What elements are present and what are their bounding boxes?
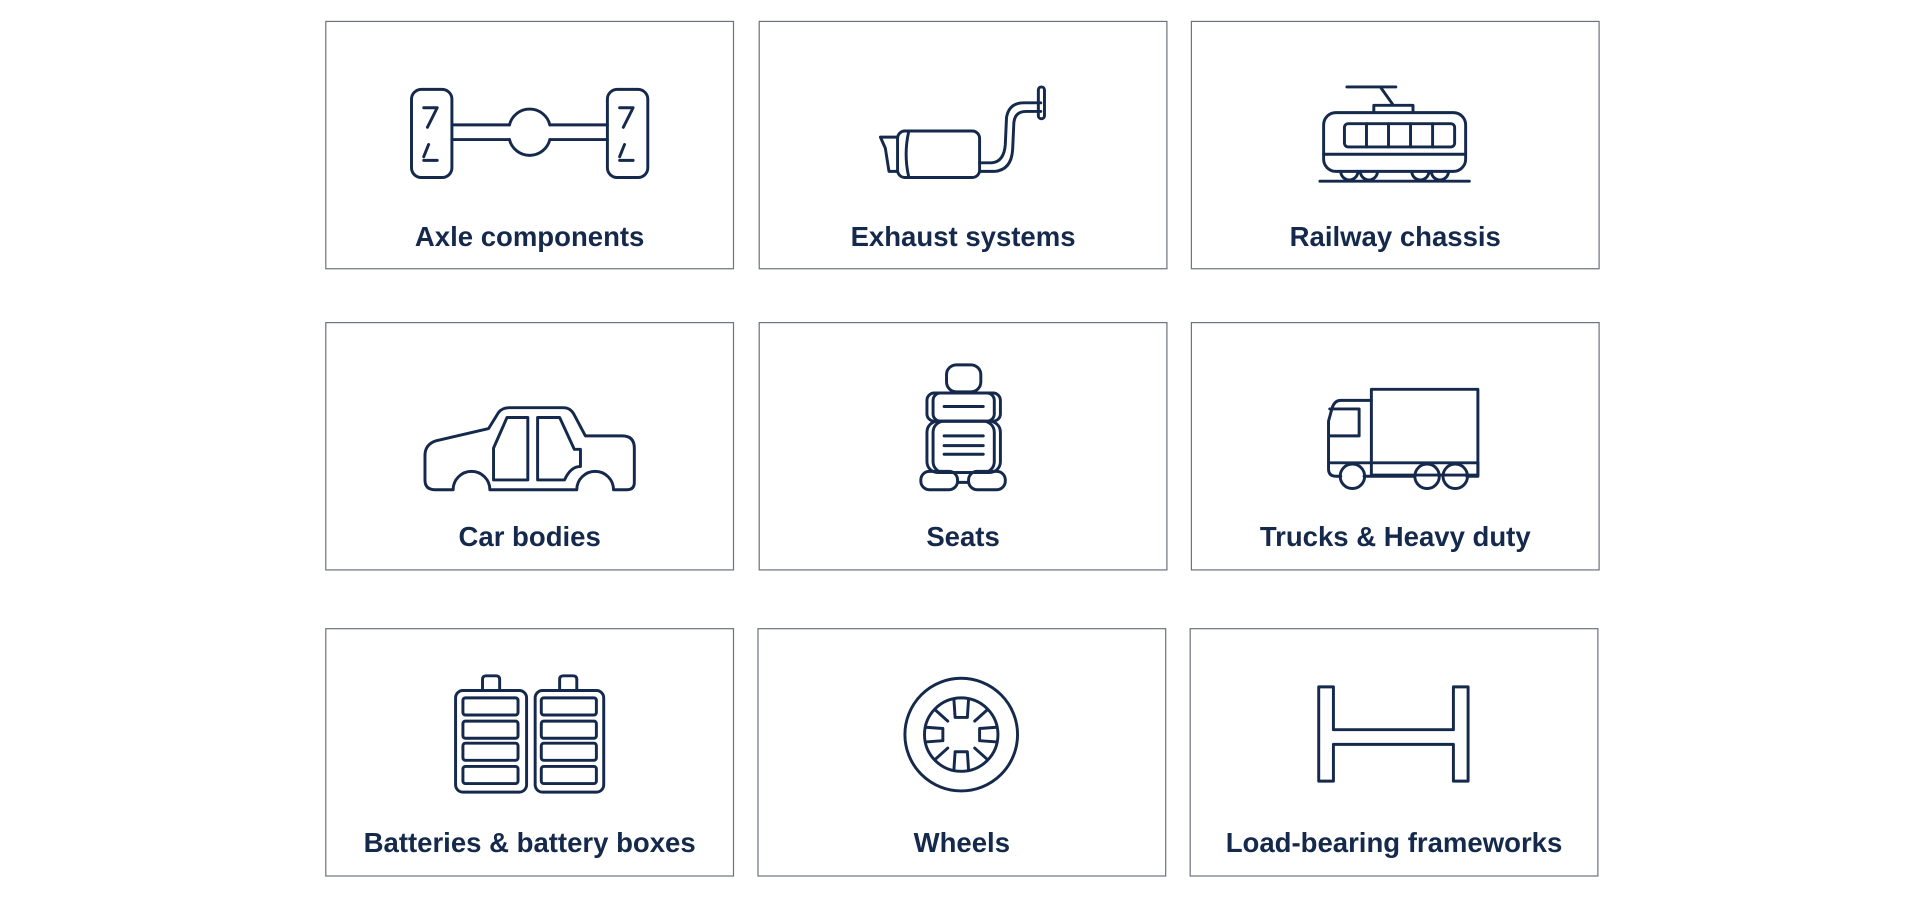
label: axle components: Axle components [415,221,644,252]
panel: car bodies [326,323,734,570]
panel: seats [759,323,1167,570]
label: exhaust systems: Exhaust systems [851,221,1076,252]
label: railway chassis: Railway chassis [1290,221,1501,252]
icon: seat [921,365,1005,490]
panel: batteries [326,629,734,876]
label: seats: Seats [926,521,1000,552]
icon: tram [1320,87,1469,181]
icon: axle [412,89,648,178]
label: wheels: Wheels [914,827,1010,858]
icon: car [425,408,634,490]
panel: exhaust systems [759,21,1167,269]
icon: wheel [905,678,1018,791]
label: load-bearing frameworks: Load-bearing frameworks [1226,827,1562,858]
label: batteries: Batteries & battery boxes [364,827,696,858]
label: trucks: Trucks & Heavy duty [1260,521,1531,552]
icon: I-beam [1319,687,1468,781]
label: car bodies: Car bodies [459,521,601,552]
panel: railway chassis [1191,21,1599,269]
panel: trucks [1191,323,1599,570]
panel: axle components [326,21,734,269]
panel: wheels [758,629,1166,876]
icon: truck [1329,389,1478,489]
icon: batteries [456,676,604,792]
icon: exhaust [880,87,1044,178]
panel: load-bearing frameworks [1190,629,1598,876]
